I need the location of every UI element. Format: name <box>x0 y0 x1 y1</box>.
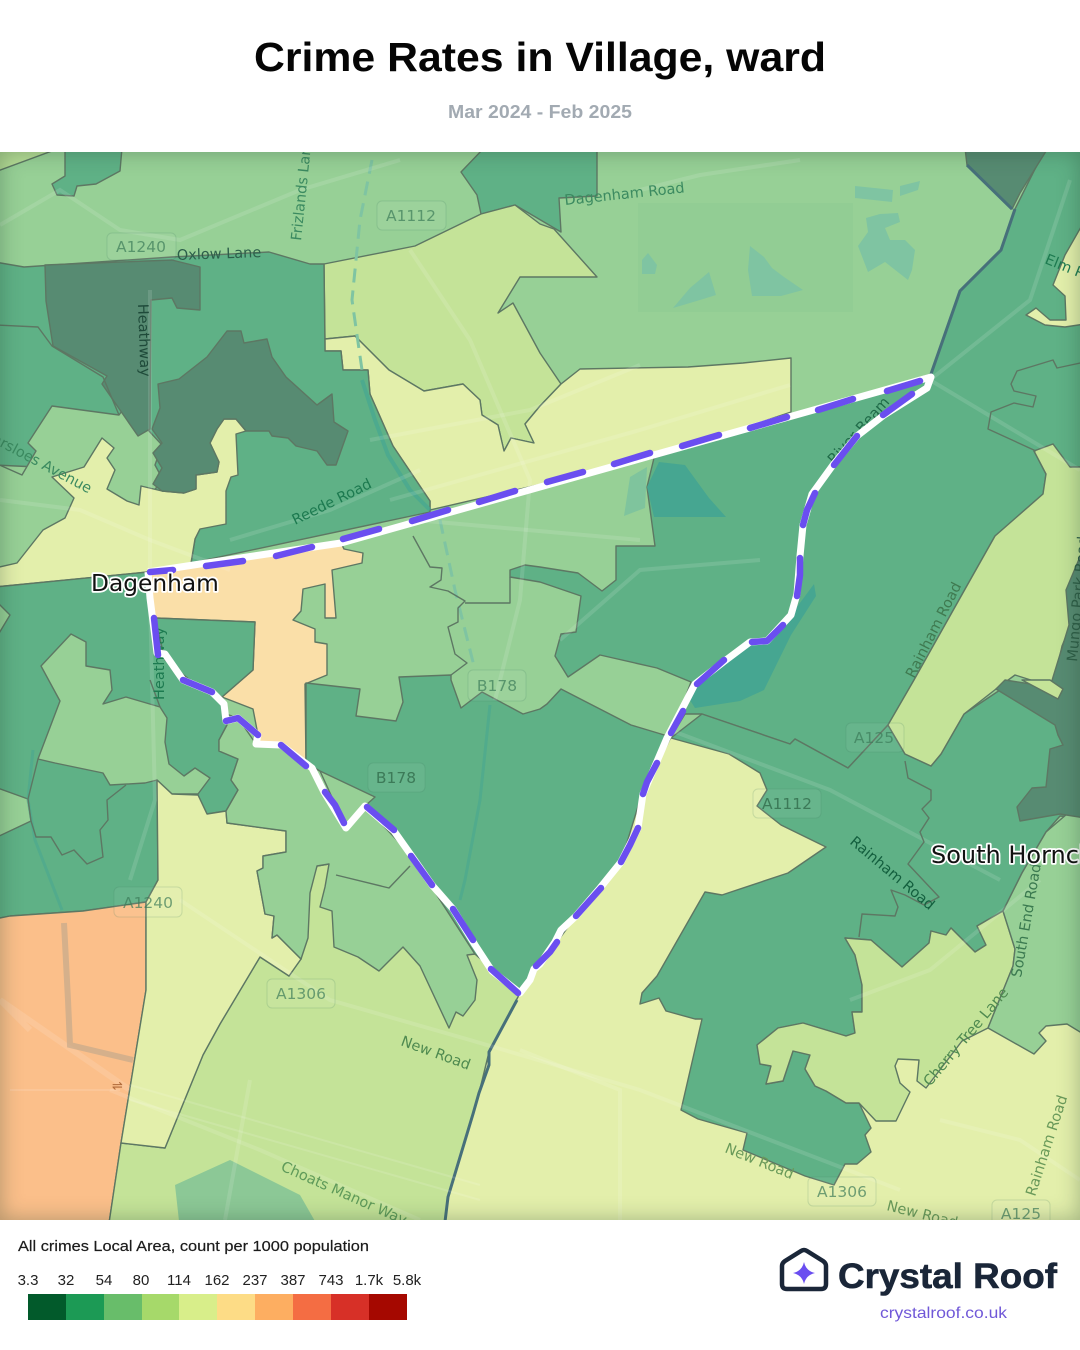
water bodies <box>28 160 920 1230</box>
road shields: A1240 <box>123 894 173 912</box>
railway station icon: ⇌ <box>112 1079 123 1094</box>
road shields: A1240 <box>116 238 166 256</box>
road labels: South End Road <box>1009 862 1045 979</box>
website url: crystalroof.co.uk <box>880 1305 1008 1322</box>
road labels: Dagenham Road <box>564 180 685 209</box>
road shields <box>107 201 1050 1229</box>
road labels: New Road <box>723 1141 796 1183</box>
road labels: New Road <box>399 1034 472 1074</box>
icon: house with star <box>782 1250 826 1289</box>
map edge vignette <box>0 152 1080 1220</box>
ward boundary: purple dashes <box>150 381 920 993</box>
road labels: Rainham Road <box>1024 1093 1071 1198</box>
wordmark: Crystal Roof <box>838 1257 1057 1296</box>
streets <box>0 160 1080 1220</box>
road labels: Cherry Tree Lane <box>921 985 1012 1090</box>
road labels: River Beam <box>825 394 893 468</box>
legend tick labels: 387 <box>280 1272 306 1289</box>
legend tick labels: 32 <box>58 1272 74 1289</box>
road shields: B178 <box>376 769 416 787</box>
road shields: A1306 <box>276 985 326 1003</box>
logo: Crystal Roof <box>780 1248 1058 1322</box>
road shields: A125 <box>854 729 894 747</box>
place label: Dagenham: Dagenham <box>91 570 219 597</box>
road labels: Heathway <box>152 627 168 700</box>
ward inner boundaries <box>28 759 126 864</box>
legend <box>18 1238 422 1320</box>
road labels: Heathway <box>134 304 153 377</box>
legend tick labels: 162 <box>204 1272 230 1289</box>
legend title: All crimes Local Area, count per 1000 population <box>18 1238 369 1255</box>
road shields: A1112 <box>386 207 436 225</box>
legend tick labels: 54 <box>96 1272 112 1289</box>
road labels: Rainham Road <box>903 580 965 681</box>
road labels: Reede Road <box>290 476 374 529</box>
legend tick labels: 5.8k <box>393 1272 422 1289</box>
legend tick labels: 743 <box>318 1272 344 1289</box>
legend tick labels: 237 <box>242 1272 268 1289</box>
road labels: Rainham Road <box>846 834 937 914</box>
legend tick labels: 3.3 <box>18 1272 38 1289</box>
legend tick labels: 114 <box>167 1272 191 1289</box>
road shields: A1112 <box>762 795 812 813</box>
title: Crime Rates in Village, ward <box>254 34 826 80</box>
industrial estate road <box>64 923 133 1060</box>
road shields: A1306 <box>817 1183 867 1201</box>
legend colour scale <box>28 1294 407 1320</box>
legend tick labels: 1.7k <box>355 1272 384 1289</box>
choropleth map <box>0 152 1080 1220</box>
ward boundary: white casing <box>148 377 931 993</box>
legend tick labels: 80 <box>133 1272 149 1289</box>
subtitle: date range: Mar 2024 - Feb 2025 <box>448 102 632 122</box>
legend tick labels <box>18 1272 422 1289</box>
road labels: Oxlow Lane <box>177 245 262 264</box>
dark river lines <box>444 165 1015 1230</box>
road shields: B178 <box>477 677 517 695</box>
